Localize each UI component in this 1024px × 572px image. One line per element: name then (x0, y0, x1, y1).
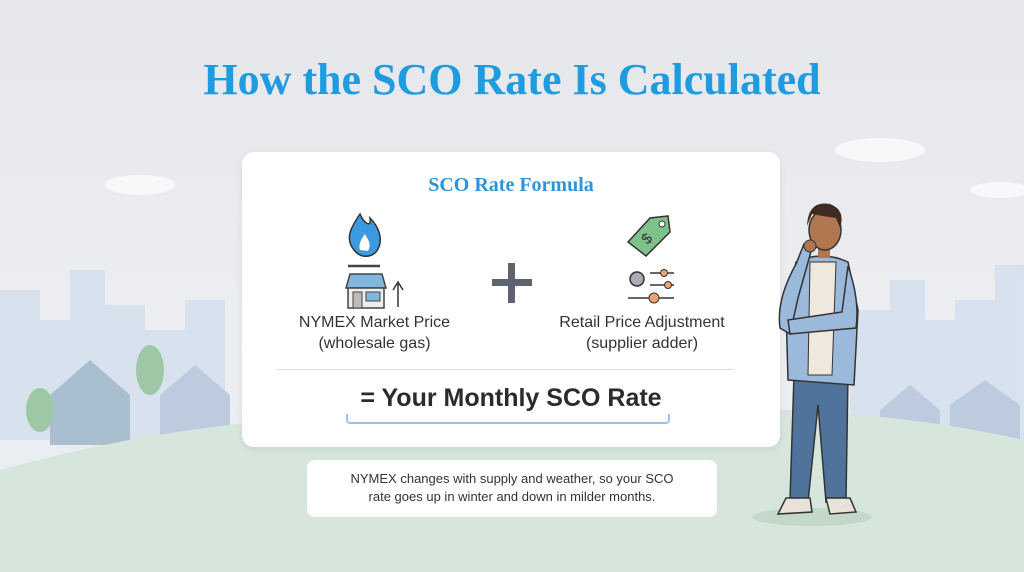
icon: plus (492, 279, 532, 286)
title: How the SCO Rate Is Calculated (203, 55, 821, 104)
result text: = Your Monthly SCO Rate (360, 384, 662, 412)
label: NYMEX (299, 314, 450, 352)
icon: price tag and sliders: $ (638, 230, 657, 248)
callout: NYMEX changes with supply and weather, so your SCO (350, 471, 674, 486)
label: NYMEX: NYMEX Market Price (299, 314, 450, 331)
label: retail adjustment: (supplier adder) (586, 335, 698, 352)
illustration: thinking man (776, 204, 859, 515)
label: retail adjustment: Retail Price Adjustment (559, 314, 725, 331)
card heading: SCO Rate Formula (428, 174, 594, 196)
label: NYMEX: (wholesale gas) (318, 335, 431, 352)
icon: flame and market (345, 212, 404, 309)
callout: rate goes up in winter and down in milder months. (369, 489, 655, 504)
callout (307, 460, 717, 517)
icon: price tag and sliders (627, 215, 674, 304)
label: retail adjustment (559, 314, 725, 352)
panel: formula card (242, 152, 780, 447)
